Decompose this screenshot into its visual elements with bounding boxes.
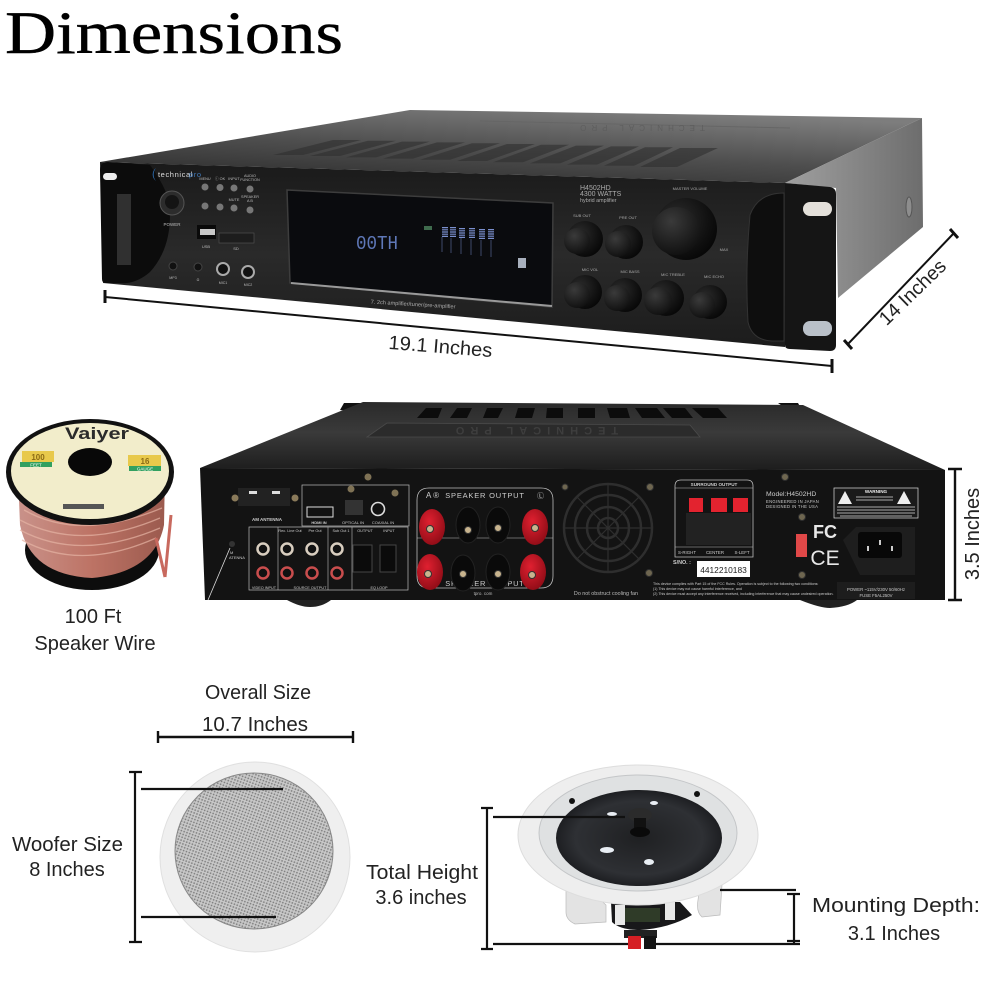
depth label: 14 Inches bbox=[875, 255, 951, 330]
antenna wire: M bbox=[230, 550, 233, 555]
RCA panel: SOURCE OUTPUT bbox=[294, 586, 327, 590]
speaker output panel: SPEAKER OUTPUT bbox=[445, 491, 525, 500]
AM antenna connector bbox=[232, 488, 298, 522]
model label: DESIGNED IN THE USA bbox=[766, 504, 818, 509]
model label bbox=[766, 491, 819, 509]
rear rack ears bbox=[340, 403, 803, 418]
amplifier front panel bbox=[100, 162, 785, 347]
compliance notes: (2) This device must accept any interference received, including interference that may cause undesired operation. bbox=[653, 592, 834, 596]
brand logo: technical bbox=[158, 170, 193, 179]
model text: hybrid amplifier bbox=[580, 198, 617, 204]
SD slot: SD bbox=[233, 246, 239, 251]
right handle bbox=[747, 193, 784, 341]
speaker trim ring bbox=[160, 762, 350, 952]
knobs: MIC BASS bbox=[620, 269, 640, 274]
model label: Model:H4502HD bbox=[766, 491, 816, 498]
speaker wire spool bbox=[6, 419, 174, 590]
amplifier top face: TECHNICAL PRO bbox=[575, 123, 705, 132]
RCA panel: Rec. Line Out bbox=[278, 529, 303, 533]
woofer size bracket bbox=[129, 772, 283, 942]
front buttons: AUDIO bbox=[244, 174, 256, 178]
footage badge: 100 bbox=[31, 453, 45, 462]
left handle bbox=[100, 162, 170, 283]
RCA panel: Sub Out 1 bbox=[332, 529, 350, 533]
RCA panel bbox=[249, 527, 408, 590]
wire coil bbox=[18, 472, 165, 578]
title: Dimensions bbox=[5, 0, 343, 66]
compliance notes bbox=[653, 582, 834, 596]
model text bbox=[580, 185, 622, 204]
power rating bbox=[837, 582, 915, 599]
mounting clamps bbox=[566, 885, 722, 924]
front buttons: SPEAKER bbox=[241, 195, 259, 199]
loose wire ends bbox=[156, 515, 171, 577]
surround output panel: S-RIGHT bbox=[678, 550, 696, 555]
mounting depth bracket bbox=[655, 890, 800, 944]
front buttons: ⓘ OK bbox=[215, 176, 226, 181]
USB port bbox=[197, 225, 216, 249]
rear feet bbox=[287, 600, 857, 608]
display window: 00TH bbox=[356, 233, 398, 255]
total height bracket bbox=[481, 808, 628, 949]
footage badge: FEET bbox=[30, 462, 42, 468]
footage badge bbox=[20, 451, 54, 468]
overall size label bbox=[202, 682, 311, 736]
serial number sticker: 4412210183 bbox=[700, 565, 747, 575]
model tagline: 7. 2ch amplifier/tuner/pre-amplifier bbox=[371, 299, 456, 311]
knobs: MAX bbox=[720, 247, 729, 252]
speaker electronics bbox=[611, 900, 692, 930]
front buttons: INPUT bbox=[228, 177, 240, 181]
power rating: POWER ~115V/230V 50/60Hz bbox=[847, 587, 905, 592]
voltage switch bbox=[796, 534, 807, 557]
compliance notes: (1) This device may not cause harmful interference, and bbox=[653, 587, 742, 591]
barcode bbox=[63, 504, 104, 509]
CE mark: CE bbox=[810, 547, 840, 570]
RCA panel: OUTPUT bbox=[357, 529, 373, 533]
power button: POWER bbox=[163, 222, 181, 227]
AM antenna connector: AM ANTENNA bbox=[252, 517, 283, 522]
width dimension: 19.1 Inches bbox=[105, 290, 832, 373]
gauge badge: GAUGE bbox=[137, 466, 153, 472]
mounting depth label bbox=[812, 895, 980, 945]
warning label bbox=[834, 488, 918, 518]
audio jacks: MIC2 bbox=[244, 283, 252, 287]
speaker output panel: SPEAKER OUTPUT bbox=[445, 579, 525, 588]
rear top face: TECHNICAL PRO bbox=[450, 424, 618, 436]
overall size label: Overall Size bbox=[205, 682, 311, 704]
audio jacks: MIC1 bbox=[219, 281, 227, 285]
gauge badge: 16 bbox=[141, 457, 150, 466]
front buttons bbox=[199, 174, 260, 214]
woofer cone bbox=[556, 790, 722, 886]
speaker output panel: tpro. com bbox=[474, 591, 493, 596]
USB port: USB bbox=[202, 244, 210, 249]
knobs: MIC ECHO bbox=[704, 274, 724, 279]
height label: 3.5 Inches bbox=[962, 488, 984, 580]
knobs bbox=[564, 186, 729, 319]
digital inputs panel: HDMI IN bbox=[311, 520, 327, 525]
digital inputs panel: COAXIAL IN bbox=[372, 520, 394, 525]
woofer size label: Woofer Size bbox=[12, 834, 123, 856]
cooling fan bbox=[564, 484, 652, 572]
FCC mark: FC bbox=[813, 522, 837, 542]
spool hole bbox=[68, 448, 112, 476]
ceiling speaker angled view bbox=[518, 765, 758, 949]
brand logo bbox=[153, 168, 202, 181]
speaker output panel: A ® bbox=[426, 491, 439, 500]
speaker wire label: Speaker Wire bbox=[34, 633, 156, 655]
amplifier side face bbox=[785, 118, 923, 298]
SD slot bbox=[219, 233, 254, 251]
spool label bbox=[11, 423, 169, 519]
width label: 19.1 Inches bbox=[388, 332, 493, 362]
mounting screws bbox=[569, 791, 700, 804]
power socket bbox=[843, 527, 915, 575]
amplifier front view bbox=[100, 110, 923, 351]
warning label: WARNING bbox=[865, 489, 888, 494]
RCA panel: Pre Out bbox=[308, 529, 322, 533]
speaker wire label: 100 Ft bbox=[65, 606, 122, 628]
RCA panel: VIDEO INPUT bbox=[252, 586, 277, 590]
ceiling speaker front view bbox=[160, 762, 350, 952]
knobs: MIC TREBLE bbox=[661, 272, 685, 277]
brand on spool: Vaiyer bbox=[65, 424, 129, 443]
surround output panel: SURROUND OUTPUT bbox=[691, 482, 738, 487]
panel screws bbox=[562, 474, 806, 578]
serial number sticker bbox=[673, 560, 750, 577]
antenna wire: ATENNA bbox=[229, 555, 245, 560]
gauge badge bbox=[128, 455, 161, 472]
surround output panel: S-LEFT bbox=[734, 550, 750, 555]
white trim bbox=[518, 765, 758, 905]
speaker wire label bbox=[34, 606, 156, 655]
model text: 4300 WATTS bbox=[580, 191, 622, 198]
speaker grille bbox=[175, 773, 333, 929]
speaker terminals bbox=[624, 930, 657, 949]
digital inputs panel bbox=[302, 474, 409, 526]
woofer size label: 8 Inches bbox=[29, 859, 105, 881]
overall size label: 10.7 Inches bbox=[202, 714, 308, 736]
wire windings bbox=[20, 495, 163, 556]
power button bbox=[160, 191, 184, 227]
front buttons: FUNCTION bbox=[240, 178, 260, 182]
display window bbox=[287, 190, 553, 307]
speaker output panel: Ⓛ bbox=[537, 492, 544, 500]
rear top face bbox=[200, 402, 945, 470]
audio jacks: Ω bbox=[197, 278, 200, 282]
power rating: FUSE F5AL250V bbox=[860, 593, 893, 598]
front buttons: MUTE bbox=[229, 198, 240, 202]
total height label bbox=[366, 862, 478, 909]
mounting depth label: 3.1 Inches bbox=[848, 923, 940, 945]
audio jacks: MP3 bbox=[169, 276, 177, 280]
right rack ear bbox=[785, 183, 836, 351]
digital inputs panel: OPTICAL IN bbox=[342, 520, 364, 525]
front buttons: MENU bbox=[199, 177, 211, 181]
knobs: PRE OUT bbox=[619, 215, 637, 220]
speaker output panel bbox=[417, 488, 553, 596]
total height label: 3.6 inches bbox=[375, 887, 467, 909]
serial number sticker: S/NO. : bbox=[673, 560, 691, 566]
compliance notes: This device complies with Part 15 of the FCC Rules. Operation is subject to the following two conditions: bbox=[653, 582, 818, 586]
inner ring bbox=[539, 775, 737, 891]
brand logo: pro bbox=[189, 170, 202, 179]
amplifier top face bbox=[100, 110, 922, 183]
spool bottom flange bbox=[25, 510, 159, 590]
antenna wire bbox=[208, 541, 245, 600]
knobs: MASTER VOLUME bbox=[673, 186, 708, 191]
fan caption: Do not obstruct cooling fan bbox=[574, 591, 638, 597]
side screw bbox=[906, 197, 912, 217]
cone highlights bbox=[600, 801, 658, 865]
surround output panel: CENTER bbox=[706, 550, 724, 555]
tweeter bbox=[628, 808, 652, 837]
spool top flange bbox=[6, 419, 174, 525]
height dimension: 3.5 Inches bbox=[948, 469, 962, 600]
knobs: MIC VOL bbox=[582, 267, 599, 272]
total height label: Total Height bbox=[366, 862, 478, 884]
mounting depth label: Mounting Depth: bbox=[812, 895, 980, 917]
amplifier rear view bbox=[200, 402, 945, 608]
audio jacks bbox=[169, 262, 254, 287]
front buttons: A B bbox=[247, 199, 253, 203]
rear panel bbox=[200, 468, 945, 600]
RCA panel: INPUT bbox=[383, 529, 395, 533]
RCA panel: EQ LOOP bbox=[370, 586, 388, 590]
model label: ENGINEERED IN JAPAN bbox=[766, 499, 819, 504]
surround output panel bbox=[675, 480, 753, 557]
model text: H4502HD bbox=[580, 185, 611, 192]
overall size bracket bbox=[158, 731, 353, 743]
depth dimension: 14 Inches bbox=[844, 229, 958, 349]
woofer size label bbox=[12, 834, 123, 881]
knobs: SUB OUT bbox=[573, 213, 591, 218]
